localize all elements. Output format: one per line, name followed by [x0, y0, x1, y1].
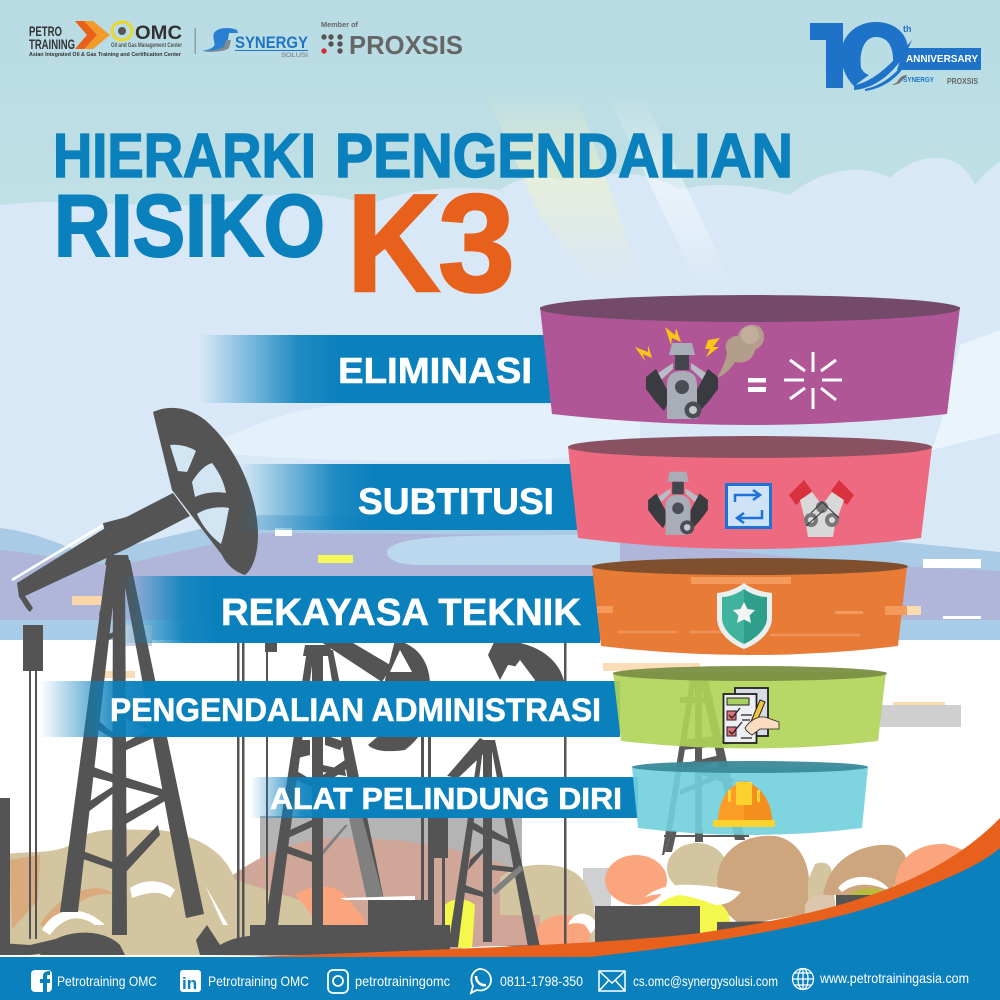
logo: Synergy Solusi: SOLUSI: [281, 52, 308, 59]
title: 3: [438, 166, 515, 321]
funnel 5: Alat Pelindung Diri: [632, 761, 868, 835]
icon: mail: [599, 971, 625, 991]
logo: OMC: [111, 22, 183, 49]
label bar: Alat Pelindung Diri: ALAT PELINDUNG DIRI: [270, 781, 622, 816]
icon: instagram: [328, 970, 348, 993]
text: linkedin: Petrotraining OMC: [208, 973, 309, 989]
logo: Synergy Solusi: SYNERGY: [235, 33, 309, 52]
label bar: Subtitusi: SUBTITUSI: [358, 481, 554, 522]
icon: facebook: [31, 970, 52, 992]
title: HIERARKI: [53, 122, 316, 191]
anniversary badge: SYNERGY: [903, 77, 934, 84]
ground hills: [0, 816, 968, 960]
logo: Petro Training: TRAINING: [29, 36, 75, 52]
logo: OMC: OMC: [135, 23, 182, 44]
funnel 1: Eliminasi: [540, 295, 960, 425]
label bar: Eliminasi: [200, 335, 552, 403]
translucent tower behind funnels: [662, 675, 749, 855]
logo: Proxsis: Member of: [321, 20, 358, 29]
label bar: Pengendalian Administrasi: [40, 681, 620, 737]
icon: hard hat: [713, 781, 775, 827]
swoosh and footer background: [0, 818, 1000, 1000]
logo: Synergy Solusi: [202, 28, 309, 59]
icon: shield with star: [717, 583, 772, 649]
logo: OMC: Oil and Gas Management Center: [111, 43, 183, 49]
icon: linkedin: [180, 970, 201, 993]
logo: Petro Training: [29, 21, 181, 58]
third pumpjack: [0, 630, 888, 958]
icon: linkedin: in: [182, 974, 197, 993]
logo: Proxsis: PROXSIS: [349, 30, 463, 60]
title: RISIKO: [54, 176, 325, 275]
anniversary badge: th: [903, 24, 912, 34]
anniversary badge: PROXSIS: [947, 77, 979, 86]
mountains: [0, 515, 1000, 727]
funnel 4: Pengendalian Administrasi: [613, 666, 887, 748]
logo: Petro Training: PETRO: [29, 23, 62, 39]
text: email: cs.omc@synergysolusi.com: [633, 973, 778, 989]
label bar: Rekayasa Teknik: [120, 576, 600, 643]
anniversary badge: [810, 22, 981, 91]
anniversary badge: ANNIVERSARY: [906, 54, 978, 65]
logo: Proxsis: [321, 20, 463, 60]
logo: Petro Training: Asian Integrated Oil & Gas Training and Certification Center: [29, 52, 181, 58]
label bar: Rekayasa Teknik: REKAYASA TEKNIK: [221, 592, 582, 634]
label bar: Eliminasi: ELIMINASI: [338, 350, 532, 391]
icon: engine with sparks and smoke: [635, 325, 764, 419]
icon: red engine: [789, 480, 854, 537]
second pumpjack: [250, 625, 450, 955]
icon: equals nothing burst: [748, 352, 842, 409]
icon: whatsapp: [471, 969, 491, 993]
logo group: Petro Training, OMC, Synergy, Proxsis: [29, 20, 463, 60]
text: instagram: petrotrainingomc: [355, 973, 450, 989]
text: website: www.petrotrainingasia.com: [819, 970, 969, 986]
footer contact row: [31, 968, 969, 993]
icon: checklist and hand: [724, 688, 779, 743]
funnel 3: Rekayasa Teknik: [592, 558, 908, 655]
title: [53, 122, 793, 321]
main pumpjack: [0, 408, 258, 953]
text: whatsapp: 0811-1798-350: [500, 973, 583, 989]
icon: engine: [648, 472, 708, 535]
funnel 2: Subtitusi: [568, 436, 932, 549]
icon: swap arrows: [726, 484, 770, 528]
label bar: Subtitusi: [240, 464, 578, 530]
title: K: [347, 166, 440, 321]
title: PENGENDALIAN: [335, 122, 793, 191]
icon: globe: [792, 968, 814, 990]
label bar: Pengendalian Administrasi: PENGENDALIAN ADMINISTRASI: [110, 692, 601, 728]
text: facebook: Petrotraining OMC: [57, 973, 157, 989]
